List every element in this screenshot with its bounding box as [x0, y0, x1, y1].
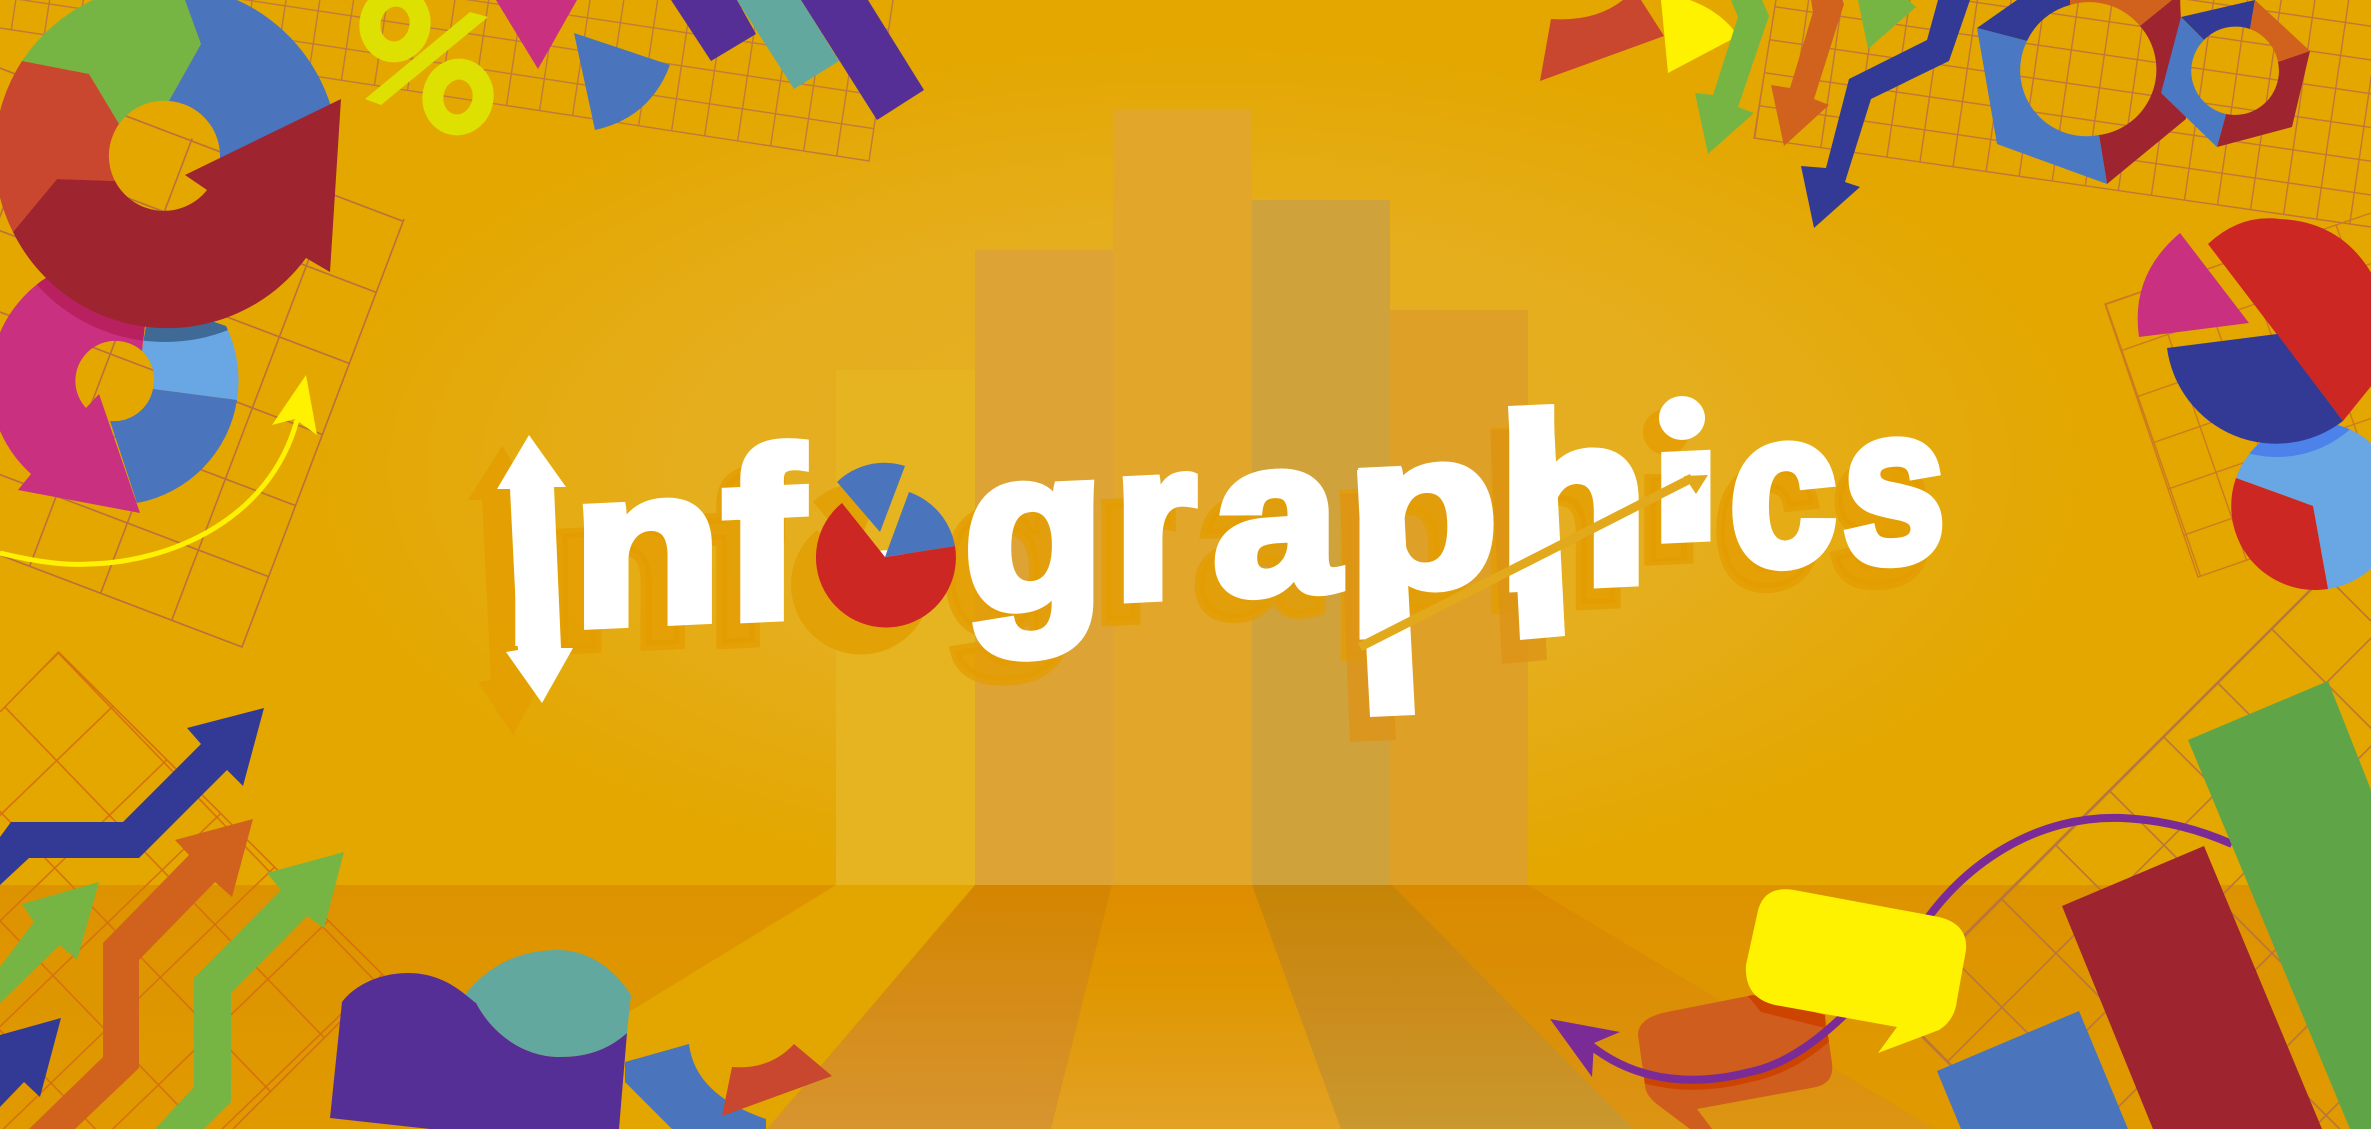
title: Infographics: n	[572, 421, 722, 673]
arrow: navy zig-zag down	[1801, 0, 1970, 228]
speech bubble: orange	[1638, 995, 1832, 1129]
title: Infographics: a	[1213, 391, 1341, 642]
title shadow: n	[545, 446, 695, 698]
top right: yellow wedge	[1661, 0, 1738, 73]
floor with bar reflections	[0, 885, 2371, 1129]
bar: blue	[1937, 1011, 2128, 1129]
title shadow: a	[1193, 414, 1321, 665]
arrow: yellow curved	[0, 375, 317, 564]
title: Infographics: r	[1114, 395, 1196, 647]
title: Infographics: g	[964, 399, 1104, 660]
pie chart: right lower	[2231, 425, 2371, 590]
title shadow: i	[1631, 415, 1707, 597]
top right: red wedge	[1540, 0, 1664, 81]
letter I: double-headed arrow: I	[498, 448, 570, 694]
ribbon bars: purple and teal	[671, 0, 924, 120]
bottom: blue curved wedge	[625, 1044, 766, 1129]
title: Infographics: p	[1348, 385, 1498, 637]
bar: dark red	[2062, 846, 2322, 1129]
bar: green	[2188, 681, 2371, 1129]
title shadow: p	[1329, 407, 1479, 659]
title shadow: c	[1713, 384, 1821, 635]
title shadow	[468, 381, 1932, 742]
arrow: small green tip	[1858, 0, 1916, 49]
title shadow: s	[1828, 381, 1932, 633]
title: Infographics: i	[1648, 393, 1724, 575]
hexagon ring: small	[2161, 0, 2310, 147]
arrows: rising bottom left	[0, 708, 344, 1129]
title: Infographics: c	[1729, 362, 1837, 613]
title: Infographics: o	[850, 507, 924, 641]
background bar chart	[836, 110, 1528, 885]
title: Infographics	[497, 396, 1942, 717]
triangle: magenta	[496, 0, 577, 69]
title shadow: r	[1092, 418, 1174, 670]
pie chart: lower left donut with magenta arrow	[0, 278, 239, 513]
title shadow: f	[699, 426, 780, 696]
arrow: purple looping curve	[1550, 818, 2232, 1080]
bottom: red wedge	[722, 1044, 832, 1116]
title: Infographics: f	[723, 400, 804, 670]
speech bubble: yellow	[1746, 889, 1966, 1053]
title: Infographics: s	[1842, 359, 1946, 611]
arrow: slash through letters	[1360, 475, 1708, 647]
title: Infographics: h	[1498, 362, 1648, 639]
area chart: purple and teal waves	[330, 950, 631, 1129]
title shadow: g	[941, 423, 1081, 684]
pie chart: upper left donut with red arrow	[0, 0, 341, 328]
icon: percent sign	[365, 0, 488, 130]
letter o: pie chart	[816, 463, 956, 627]
title shadow: h	[1480, 384, 1630, 661]
arrow: green down	[1695, 0, 1769, 154]
hexagon ring: large	[1977, 0, 2186, 184]
arrow: orange down	[1771, 0, 1844, 146]
pie chart: right upper	[2138, 218, 2371, 444]
pie wedge: blue	[574, 33, 670, 130]
